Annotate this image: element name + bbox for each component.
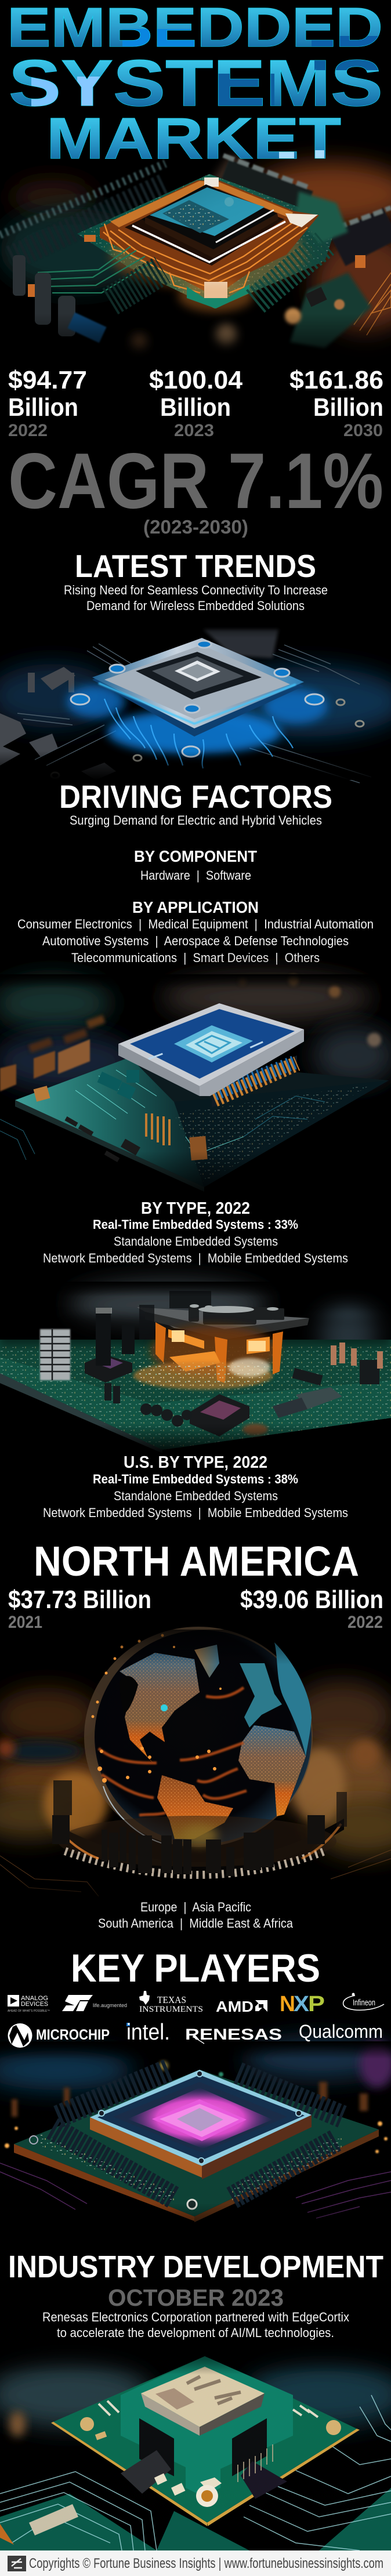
CAGR heading: (2023-2030) (143, 516, 248, 538)
U.S. by type segment: Real-Time Embedded Systems : 38% (93, 1472, 298, 1486)
by type segment: Standalone Embedded Systems (114, 1234, 278, 1249)
key players heading: KEY PLAYERS (71, 1946, 320, 1990)
logo: Infineon: Infineon (353, 1998, 375, 2008)
logo: Analog Devices: ANALOG (21, 1995, 48, 2002)
stat: 2030 market size: 2030 (343, 421, 383, 440)
regions list: South America | Middle East & Africa (98, 1916, 294, 1931)
U.S. by type segment: U.S. BY TYPE, 2022 (124, 1453, 267, 1472)
north america heading: NORTH AMERICA (34, 1539, 359, 1585)
logo: Microchip (8, 2023, 110, 2048)
north america 2022 value (240, 1585, 383, 1632)
by type segment: Network Embedded Systems | Mobile Embedded Systems (43, 1251, 348, 1265)
footer logo (8, 2556, 26, 2571)
stat: 2023 market size: $100.04 (149, 366, 243, 394)
industry development text: Renesas Electronics Corporation partnered with EdgeCortix (42, 2310, 349, 2324)
by component segment: BY COMPONENT (134, 847, 257, 865)
industry development text: to accelerate the development of AI/ML technologies. (57, 2325, 334, 2340)
by application segment: BY APPLICATION (132, 898, 259, 916)
industry development text (42, 2310, 349, 2340)
stat: 2023 market size: Billion (160, 393, 231, 422)
image: pink glowing chip (0, 2039, 391, 2250)
stat: 2030 market size: Billion (313, 393, 383, 422)
driving factors heading: DRIVING FACTORS (59, 778, 332, 815)
by application segment: Automotive Systems | Aerospace & Defense Technologies (42, 934, 349, 948)
U.S. by type segment: Network Embedded Systems | Mobile Embedded Systems (43, 1505, 348, 1520)
title (7, 0, 383, 171)
latest trends text (64, 583, 328, 613)
by component segment (134, 847, 257, 883)
logo: NXP (280, 1992, 325, 2016)
image: orange circuit chip (0, 155, 391, 371)
north america 2021 value (8, 1585, 151, 1632)
north america 2021 value: 2021 (8, 1613, 42, 1632)
logo: Qualcomm: Qualcomm (299, 2021, 383, 2042)
stat: 2023 market size: 2023 (174, 421, 214, 440)
north america 2021 value: $37.73 Billion (8, 1585, 151, 1614)
image: blue chip on teal board (0, 974, 391, 1195)
logo: NXP: N (280, 1992, 295, 2016)
stat: 2022 market size: $94.77 (8, 366, 87, 394)
logo: Analog Devices: DEVICES (21, 2001, 48, 2008)
footer bar (0, 2550, 391, 2576)
image: blue glowing chip (0, 615, 391, 783)
logo: Renesas: RENESAS (185, 2026, 282, 2043)
title line 2: SYSTEMS (9, 46, 383, 119)
by type segment: BY TYPE, 2022 (141, 1199, 250, 1218)
regions list (98, 1900, 294, 1931)
stat: 2030 market size (289, 366, 383, 440)
by type segment: Real-Time Embedded Systems : 33% (93, 1217, 298, 1232)
logo: Texas Instruments: INSTRUMENTS (139, 2005, 203, 2014)
logo: NXP: X (294, 1992, 310, 2016)
regions list: Europe | Asia Pacific (140, 1900, 251, 1914)
logo: ST (62, 1995, 127, 2011)
stat: 2023 market size (149, 366, 243, 440)
by type segment (43, 1199, 348, 1265)
by application segment: Telecommunications | Smart Devices | Others (71, 950, 320, 965)
logo: AMD: AMD (216, 1998, 254, 2015)
logo: AMD (216, 1998, 267, 2015)
latest trends text: Rising Need for Seamless Connectivity To Increase (64, 583, 328, 597)
key player logos (8, 1991, 384, 2048)
latest trends text: Demand for Wireless Embedded Solutions (86, 598, 305, 613)
stat: 2022 market size: Billion (8, 393, 78, 422)
logo: Intel: intel. (126, 2020, 170, 2045)
title line 3: MARKET (46, 106, 341, 171)
by application segment (17, 898, 374, 965)
logo: ST: life.augmented (93, 2002, 127, 2008)
latest trends heading: LATEST TRENDS (75, 548, 316, 584)
U.S. by type segment (43, 1453, 348, 1520)
logo: Analog Devices (8, 1995, 50, 2013)
north america 2022 value: 2022 (347, 1613, 383, 1632)
stat: 2030 market size: $161.86 (289, 366, 383, 394)
U.S. by type segment: Standalone Embedded Systems (114, 1489, 278, 1503)
industry development date: OCTOBER 2023 (108, 2284, 284, 2311)
logo: Microchip: MICROCHIP (36, 2027, 110, 2043)
image: globe on circuit platform (0, 1627, 391, 1905)
stat: 2022 market size: 2022 (8, 421, 48, 440)
by component segment: Hardware | Software (140, 868, 251, 883)
driving factors text: Surging Demand for Electric and Hybrid Vehicles (70, 813, 322, 828)
logo: NXP: P (308, 1992, 325, 2016)
stat: 2022 market size (8, 366, 87, 440)
image: orange lit circuit board (0, 1282, 391, 1456)
logo: Infineon (343, 1993, 384, 2010)
logo: Texas Instruments: TEXAS (157, 1994, 186, 2005)
image: green board with beige chip (0, 2340, 391, 2550)
logo: Analog Devices: AHEAD OF WHAT'S POSSIBLE™ (8, 2009, 50, 2013)
logo: Texas Instruments (139, 1991, 203, 2014)
